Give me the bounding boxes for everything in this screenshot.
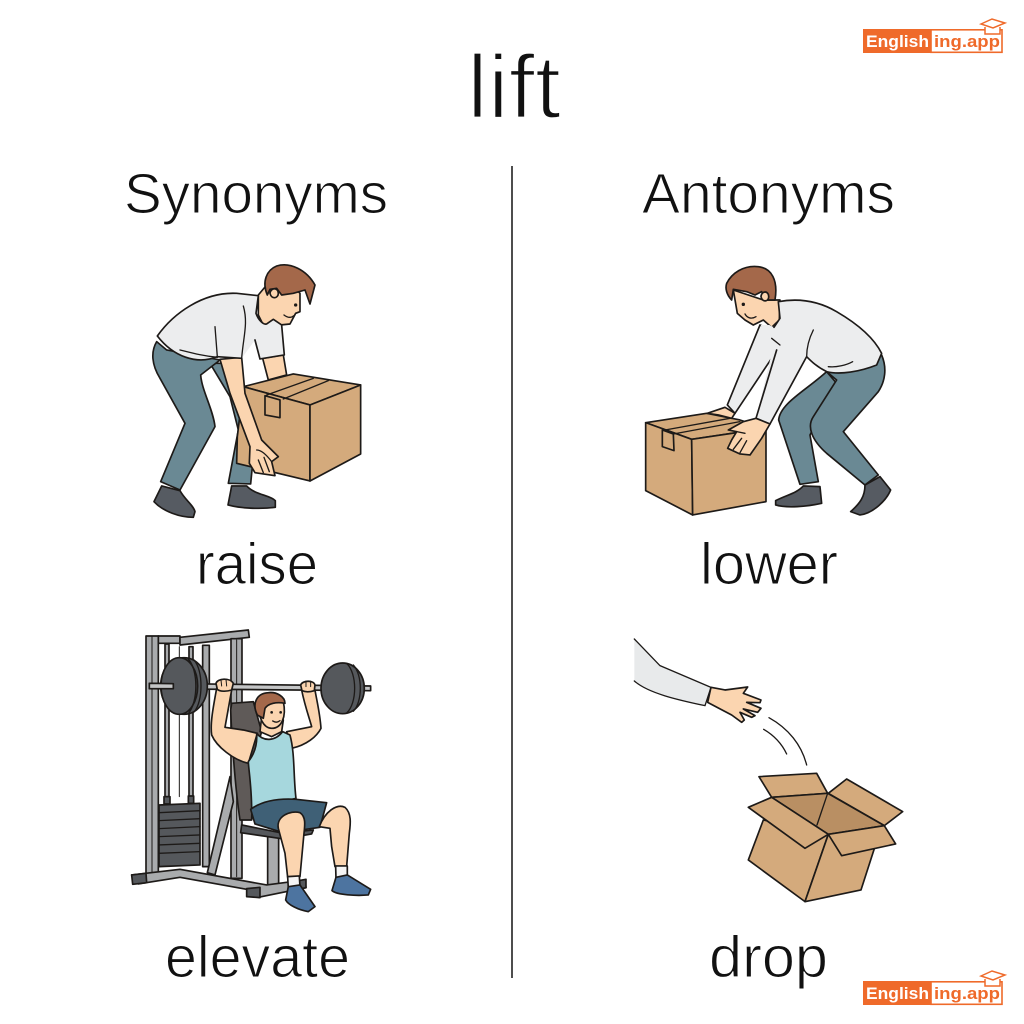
athlete [211,679,371,912]
motion lines [764,718,807,765]
illustration: hand dropping into an open box [634,639,903,902]
illustration: man raising a box [153,265,361,517]
illustration: man on press machine [132,630,371,912]
open box [748,773,903,902]
logo: bottom [863,971,1005,1005]
hand [708,687,761,722]
heading: Synonyms: Synonyms [124,162,388,226]
title: lift [467,38,561,138]
logo: top: ing.app [934,32,1000,51]
label: lower: lower [700,532,838,597]
illustration: man lowering a box [646,266,891,515]
logo: top [863,19,1005,53]
center divider [511,166,513,978]
logo: top: English [866,32,929,51]
logo: bottom: ing.app [934,984,1000,1003]
heading: Antonyms: Antonyms [642,162,895,226]
machine frame [132,630,306,898]
label: raise: raise [196,532,318,597]
barbell [149,658,371,714]
label: elevate: elevate [165,925,350,990]
label: drop: drop [709,925,828,990]
logo: bottom: English [866,984,929,1003]
sleeve [634,639,711,706]
weight stack [159,796,200,867]
seat [231,702,313,839]
